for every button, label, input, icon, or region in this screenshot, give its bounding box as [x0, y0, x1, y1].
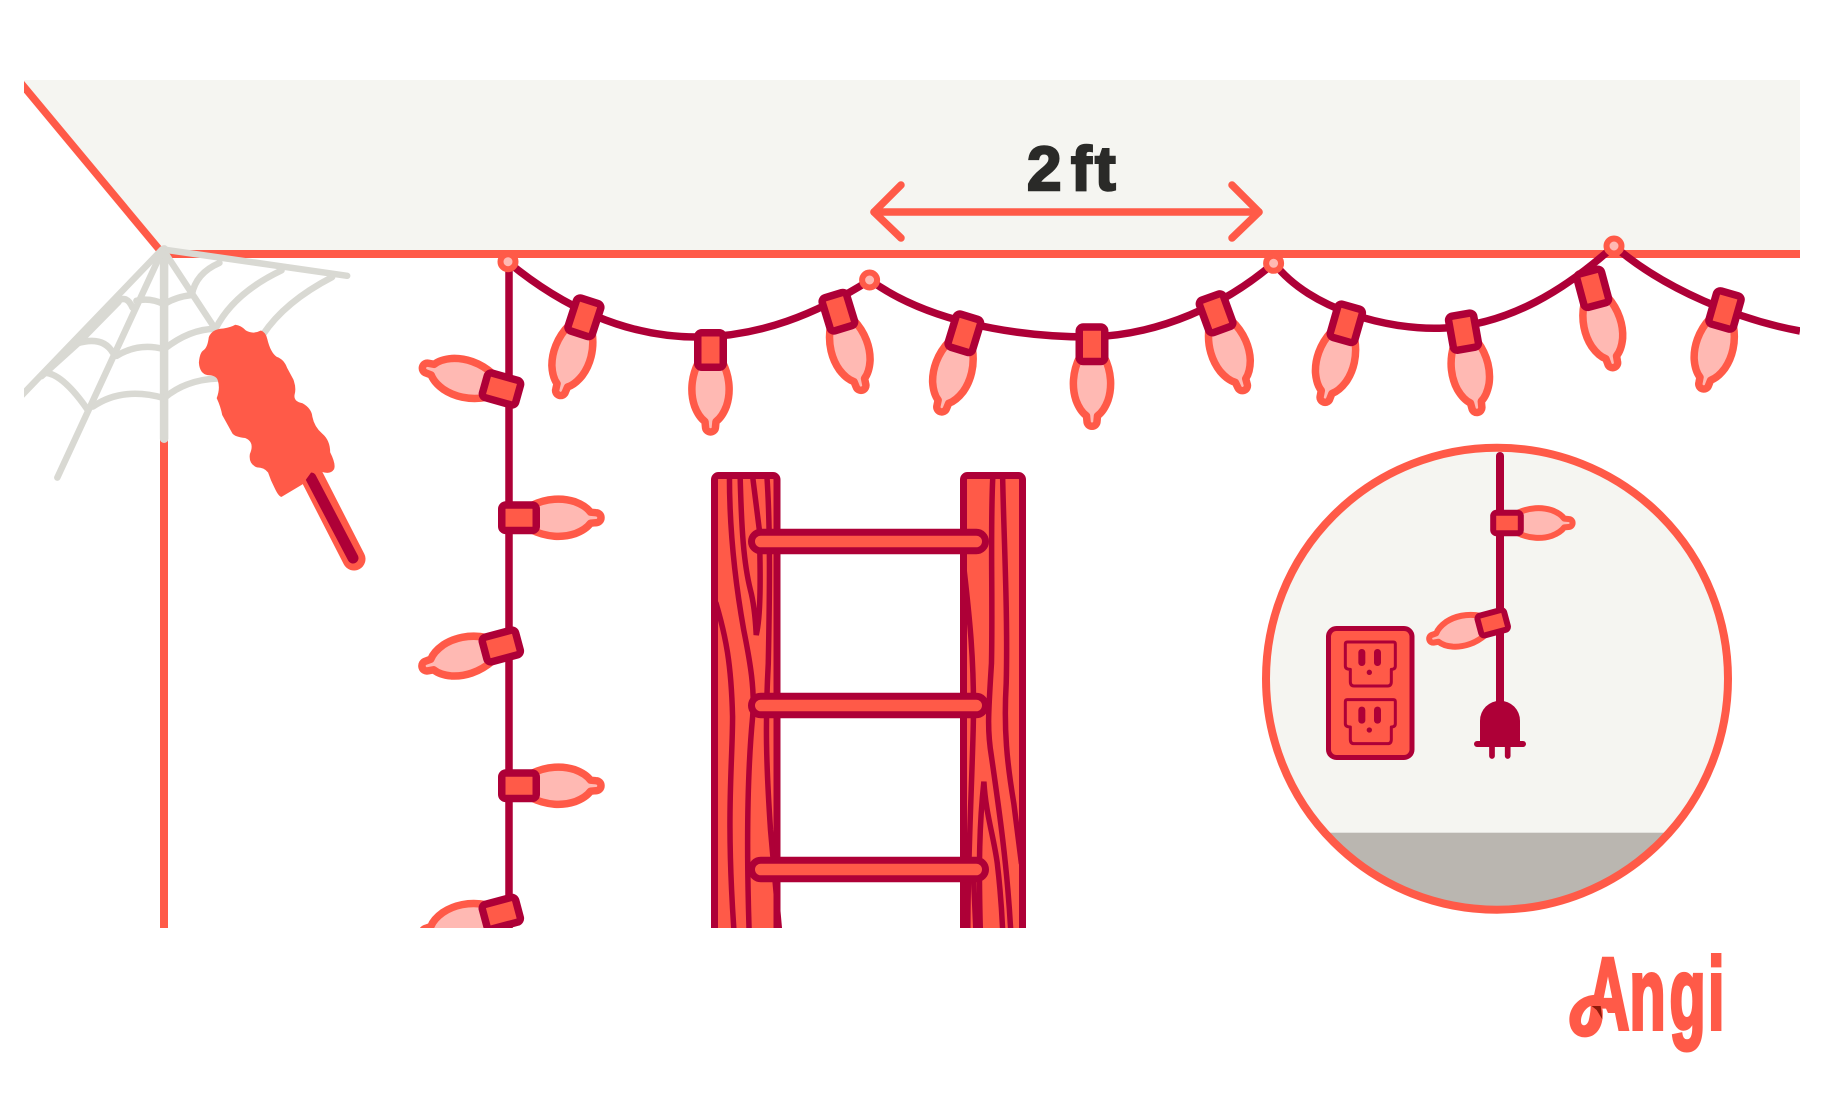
spider web [16, 249, 347, 478]
icon: wall outlet [1328, 628, 1412, 758]
measurement label: 2 ft [1027, 135, 1116, 204]
inset circle: outlet detail [1262, 448, 1732, 923]
icon: plug [1477, 701, 1523, 756]
cord with bulbs [1425, 456, 1573, 705]
ladder [714, 476, 1022, 946]
ladder rungs [752, 532, 986, 879]
measurement arrow [874, 185, 1259, 238]
icon: duster [199, 325, 354, 559]
ladder right rail [963, 476, 1022, 946]
Angi logo: Angi [1587, 937, 1724, 1051]
ceiling [24, 80, 1800, 252]
left wall-ceiling edge [20, 82, 163, 254]
ceiling light string [500, 238, 1800, 432]
vertical light string [417, 262, 601, 953]
room scene [16, 80, 1800, 953]
ceiling edge [160, 250, 1800, 258]
ladder left rail [714, 476, 779, 946]
floor [1330, 832, 1664, 906]
wall corner [160, 440, 168, 928]
